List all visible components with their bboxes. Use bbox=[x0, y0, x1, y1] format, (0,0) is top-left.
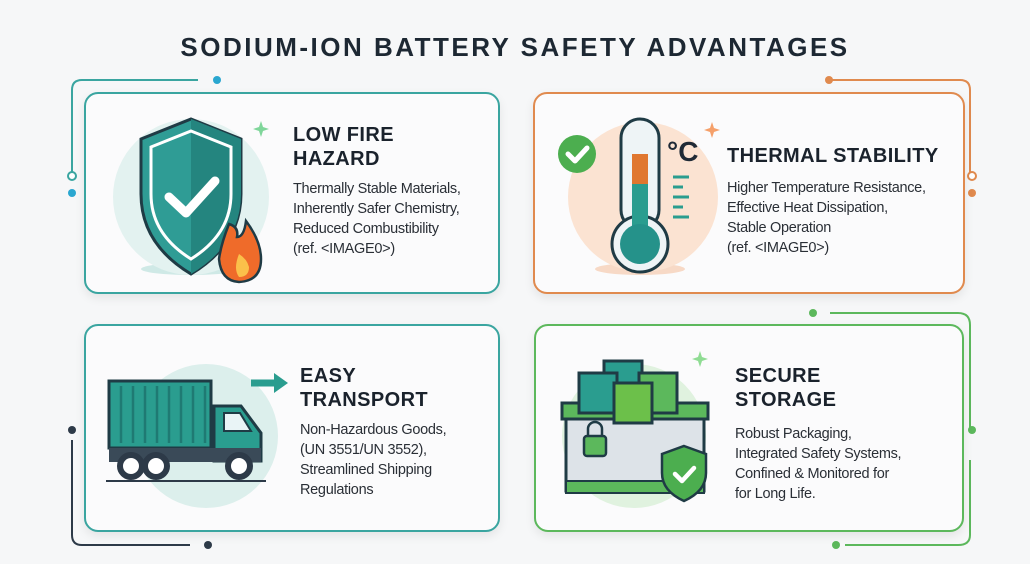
icon: thermometer bbox=[558, 118, 720, 275]
heading: STORAGE bbox=[735, 389, 836, 411]
heading: THERMAL STABILITY bbox=[727, 145, 939, 167]
text block: Non-Hazardous Goods, bbox=[300, 422, 446, 438]
panel: secure storage bbox=[534, 324, 964, 532]
text block: Higher Temperature Resistance, bbox=[727, 180, 926, 196]
heading: HAZARD bbox=[293, 148, 380, 170]
heading: TRANSPORT bbox=[300, 389, 428, 411]
icon: shield with fire bbox=[113, 117, 269, 284]
text block: (ref. <IMAGE0>) bbox=[293, 241, 395, 257]
text block: Streamlined Shipping bbox=[300, 462, 432, 478]
panel: thermal stability bbox=[533, 92, 965, 294]
text block bbox=[727, 180, 926, 256]
text block: Integrated Safety Systems, bbox=[735, 446, 901, 462]
text block: Stable Operation bbox=[727, 220, 831, 236]
text block bbox=[300, 422, 446, 498]
text block: Inherently Safer Chemistry, bbox=[293, 201, 460, 217]
icon: battery storage box bbox=[560, 351, 710, 508]
title: SODIUM-ION BATTERY SAFETY ADVANTAGES bbox=[180, 32, 850, 62]
text block: Thermally Stable Materials, bbox=[293, 181, 461, 197]
text block: Robust Packaging, bbox=[735, 426, 852, 442]
text block: Reduced Combustibility bbox=[293, 221, 439, 237]
heading bbox=[735, 365, 836, 411]
text block: Confined & Monitored for bbox=[735, 466, 889, 482]
text block: Effective Heat Dissipation, bbox=[727, 200, 888, 216]
heading bbox=[300, 365, 428, 411]
text block bbox=[293, 181, 461, 257]
heading: EASY bbox=[300, 365, 356, 387]
icon: truck bbox=[106, 364, 288, 508]
heading bbox=[293, 124, 394, 170]
heading: SECURE bbox=[735, 365, 821, 387]
panel: low fire hazard bbox=[84, 92, 500, 294]
text block: for Long Life. bbox=[735, 486, 815, 502]
heading: LOW FIRE bbox=[293, 124, 394, 146]
panel: easy transport bbox=[84, 324, 500, 532]
text block: (ref. <IMAGE0>) bbox=[727, 240, 829, 256]
icon: thermometer: °C bbox=[667, 136, 698, 167]
text block: (UN 3551/UN 3552), bbox=[300, 442, 427, 458]
text block bbox=[735, 426, 901, 502]
text block: Regulations bbox=[300, 482, 373, 498]
